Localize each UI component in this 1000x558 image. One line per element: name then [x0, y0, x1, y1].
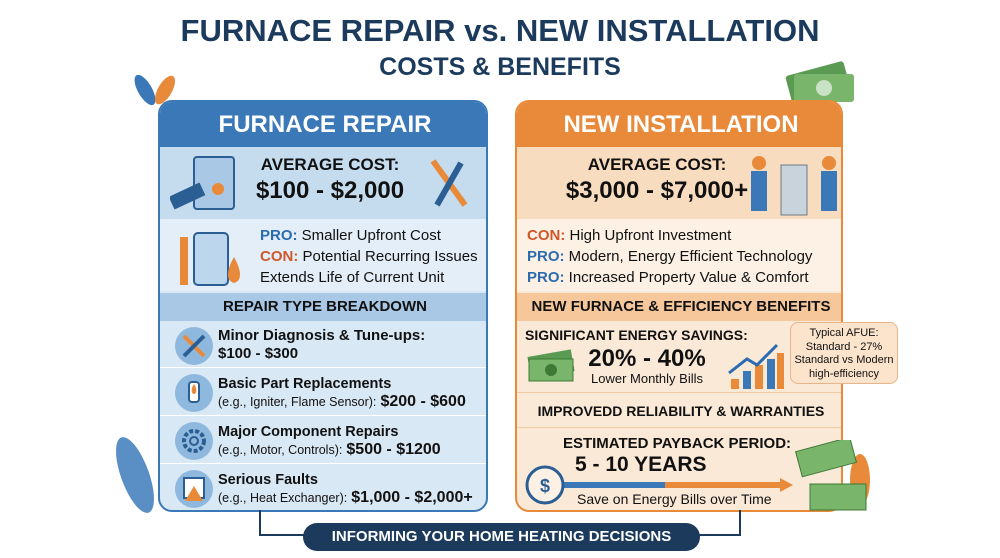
icon: boiler warning — [180, 232, 240, 286]
payback — [526, 435, 793, 507]
icon: clock timeline: $ — [540, 476, 550, 496]
item: major — [160, 416, 490, 464]
cost block: $100 - $2,000 — [256, 177, 404, 204]
icon: cash — [527, 349, 575, 382]
payback: Save on Energy Bills over Time — [577, 491, 772, 507]
pros cons: CON: High Upfront Investment — [527, 227, 731, 244]
heading: benefits: NEW FURNACE & EFFICIENCY BENEFITS — [532, 298, 830, 315]
icon: tools — [430, 159, 468, 207]
item: minor: $100 - $300 — [218, 345, 298, 362]
banner: footer: INFORMING YOUR HOME HEATING DECISIONS — [332, 528, 671, 545]
heading: benefits — [517, 293, 845, 321]
banner: footer — [303, 523, 700, 551]
cost block: AVERAGE COST: — [261, 155, 399, 174]
item: basic: Basic Part Replacements — [218, 376, 391, 392]
reliability: IMPROVEDD RELIABILITY & WARRANTIES — [538, 403, 824, 419]
heading: new installation: NEW INSTALLATION — [563, 111, 799, 138]
panel: new installation — [515, 100, 843, 512]
decorative leaves bottom left — [116, 437, 154, 513]
item: basic: (e.g., Igniter, Flame Sensor): $200 - $600 — [218, 393, 466, 410]
title — [181, 13, 819, 81]
energy savings: 20% - 40% — [588, 345, 706, 372]
repair list — [160, 327, 486, 508]
item: basic — [160, 368, 490, 416]
pros cons: PRO: Increased Property Value & Comfort — [527, 269, 808, 286]
callout: AFUE — [790, 322, 898, 384]
energy savings: Lower Monthly Bills — [591, 371, 703, 386]
callout: AFUE: high-efficiency — [809, 368, 879, 380]
decorative leaves left — [134, 74, 176, 106]
title: FURNACE REPAIR vs. NEW INSTALLATION — [181, 13, 819, 48]
heading: repair type breakdown: REPAIR TYPE BREAKDOWN — [223, 298, 427, 315]
pros cons: PRO: Modern, Energy Efficient Technology — [527, 248, 812, 265]
pros cons: PRO: Smaller Upfront Cost — [260, 227, 441, 244]
heading: furnace repair: FURNACE REPAIR — [219, 111, 431, 138]
pros cons: Extends Life of Current Unit — [260, 269, 444, 286]
panel: furnace repair — [158, 100, 488, 512]
icon: money bottom right — [795, 440, 870, 510]
payback: ESTIMATED PAYBACK PERIOD: — [563, 435, 791, 452]
item: serious: Serious Faults — [218, 472, 318, 488]
callout: AFUE: Standard - 27% — [806, 340, 882, 352]
connector lines — [259, 510, 741, 536]
icon: money top right — [786, 61, 854, 102]
pros cons — [160, 219, 490, 291]
reliability — [517, 394, 845, 428]
title: COSTS & BENEFITS — [379, 53, 621, 81]
cost block — [160, 147, 490, 219]
cost block: AVERAGE COST: — [588, 155, 726, 174]
item: major: Major Component Repairs — [218, 424, 398, 440]
cost block: $3,000 - $7,000+ — [566, 177, 748, 204]
pros cons — [517, 219, 845, 291]
icon: workers and furnace — [751, 156, 837, 216]
callout: AFUE: Typical AFUE: — [809, 327, 879, 339]
item: minor: Minor Diagnosis & Tune-ups: — [218, 327, 425, 344]
icon: furnace with wrench — [170, 156, 235, 210]
energy savings — [517, 321, 845, 393]
energy savings: SIGNIFICANT ENERGY SAVINGS: — [525, 327, 748, 343]
chart: rising bars — [728, 344, 784, 389]
pros cons: CON: Potential Recurring Issues — [260, 248, 478, 265]
heading: furnace repair — [160, 102, 490, 147]
heading: new installation — [517, 102, 845, 147]
item: major: (e.g., Motor, Controls): $500 - $1200 — [218, 441, 441, 458]
icon: clock timeline — [526, 466, 793, 504]
item: serious — [175, 470, 473, 508]
payback: 5 - 10 YEARS — [575, 453, 707, 476]
item: serious: (e.g., Heat Exchanger): $1,000 - $2,000+ — [218, 489, 473, 506]
heading: repair type breakdown — [160, 293, 490, 321]
cost block — [517, 147, 845, 219]
callout: AFUE: Standard vs Modern — [794, 354, 894, 366]
item: minor — [160, 321, 490, 368]
